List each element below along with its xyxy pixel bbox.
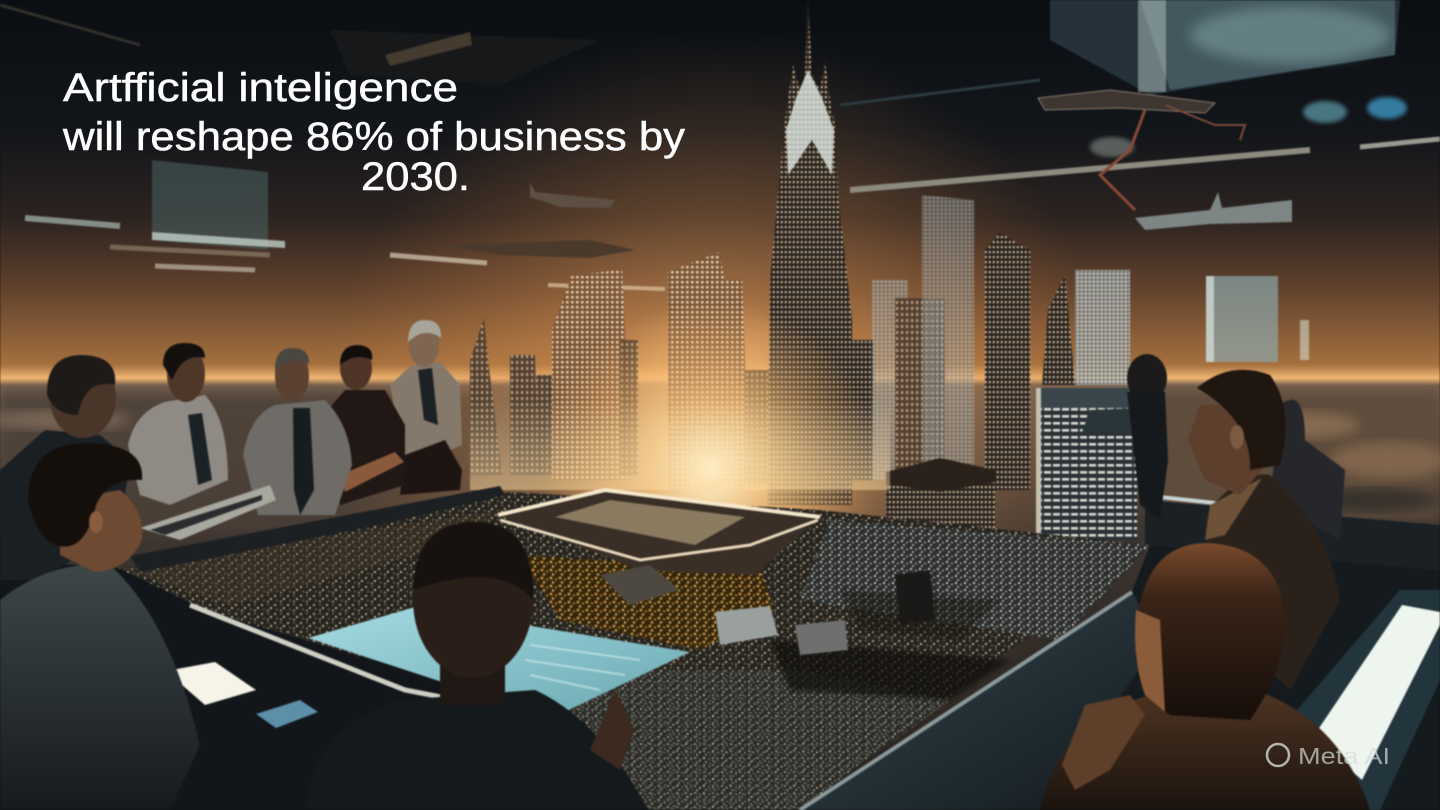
- title text: will reshape 86% of business by: [62, 115, 685, 159]
- central spire tower: [768, 0, 852, 505]
- bright model area near towers: [800, 520, 1150, 640]
- person 2: [128, 343, 228, 505]
- person 5: [390, 320, 462, 495]
- table edge right: [800, 497, 1440, 810]
- holographic panels left: [25, 160, 665, 289]
- holographic city table: [118, 486, 1150, 810]
- person 4: [328, 345, 405, 505]
- person right standing: [1188, 370, 1345, 690]
- head: [1136, 543, 1285, 720]
- small model buildings: [715, 606, 778, 645]
- light panel frame: [1280, 590, 1440, 810]
- background towers: [470, 195, 1130, 490]
- title text: [62, 66, 685, 199]
- ear: [1230, 425, 1244, 449]
- group of standing people: [0, 320, 462, 580]
- face: [1188, 405, 1262, 495]
- torso: [1205, 474, 1340, 690]
- ear: [89, 511, 103, 533]
- table edge left with tablet: [0, 560, 690, 810]
- hair: [1197, 370, 1286, 470]
- striped tower foreground: [1036, 388, 1137, 540]
- lit cheek: [1135, 610, 1165, 712]
- block tower foreground: [886, 458, 995, 568]
- drone large: [1038, 90, 1245, 210]
- person 3: [243, 348, 352, 515]
- tablet: [308, 607, 690, 718]
- drone upper left: [530, 182, 615, 208]
- drone lower left: [440, 240, 635, 258]
- watermark: Meta AI: [1267, 743, 1390, 769]
- watermark: Meta AI: Meta AI: [1298, 743, 1390, 769]
- papers on table: [140, 485, 276, 540]
- title text: 2030.: [361, 155, 470, 199]
- person foreground centre: [305, 522, 648, 810]
- glowing light panel: [1313, 605, 1440, 780]
- central plaza building: [498, 490, 820, 575]
- central light glow: [470, 300, 960, 600]
- drone small right: [1135, 192, 1292, 230]
- orange model blocks: [520, 555, 775, 650]
- person 1: [0, 355, 130, 580]
- person foreground left: [0, 443, 200, 810]
- face: [60, 490, 142, 572]
- city skyline: [470, 0, 1137, 568]
- person foreground right: [1040, 543, 1370, 810]
- hair: [28, 443, 142, 547]
- ceiling structure: [0, 0, 1440, 190]
- holographic drones: [440, 90, 1292, 258]
- person far right back: [1127, 354, 1168, 520]
- title text: Artfficial inteligence: [63, 66, 458, 110]
- holographic panel right: [1206, 276, 1309, 362]
